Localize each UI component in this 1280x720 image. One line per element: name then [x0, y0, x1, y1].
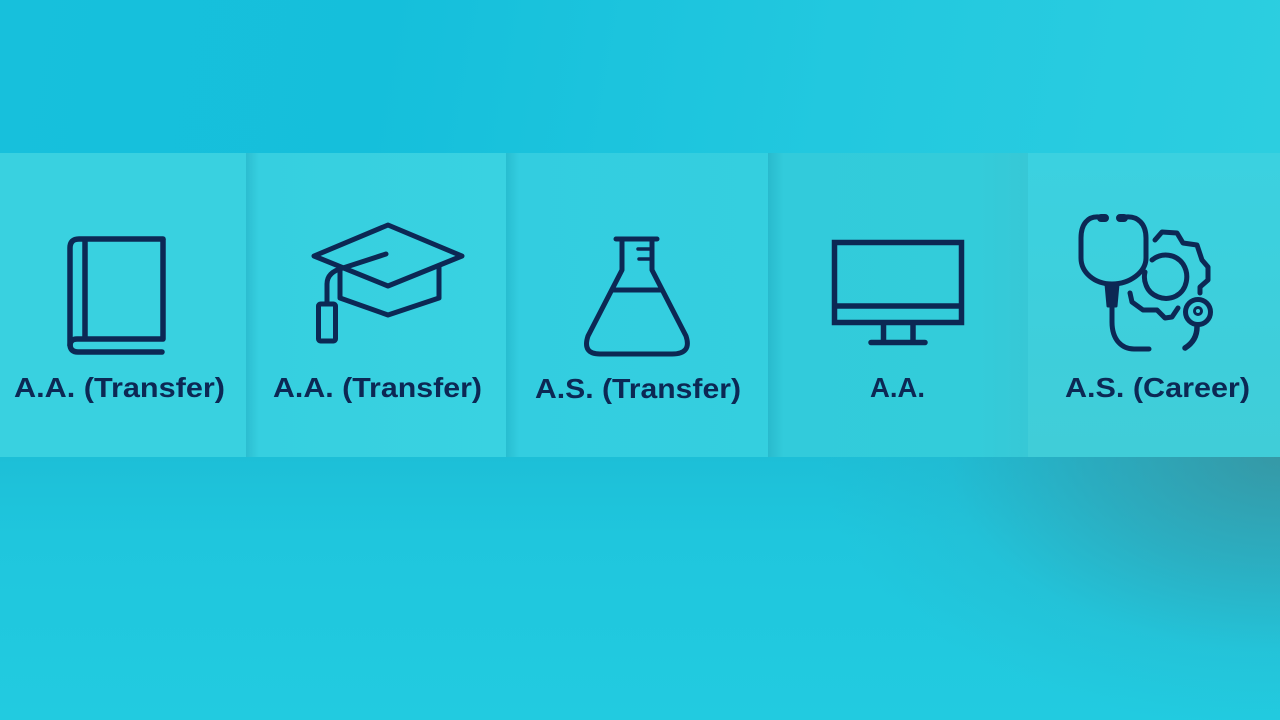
card 5: [1028, 153, 1280, 457]
label: A.S. (Transfer): A.S. (Transfer): [535, 373, 741, 404]
icon: book: [70, 239, 163, 352]
background corner shade: [780, 457, 1280, 720]
icon: stethoscope and gear: [1081, 217, 1210, 349]
icon: computer monitor: [834, 242, 962, 342]
background top gradient: [0, 0, 1280, 153]
card 4: [768, 153, 1028, 457]
background bottom gradient: [0, 457, 1280, 720]
card 3: [506, 153, 768, 457]
label: A.A.: A.A.: [870, 372, 925, 403]
label: A.A. (Transfer) second: A.A. (Transfer): [273, 372, 482, 403]
card 2: [246, 153, 506, 457]
label: A.A. (Transfer) first: A.A. (Transfer): [14, 372, 225, 403]
icon: flask: [586, 239, 687, 354]
panel strip of five degree cards: [0, 153, 1280, 457]
icon: graduation cap: [314, 225, 462, 341]
card 1: [0, 153, 246, 457]
label: A.S. (Career): A.S. (Career): [1065, 372, 1250, 403]
